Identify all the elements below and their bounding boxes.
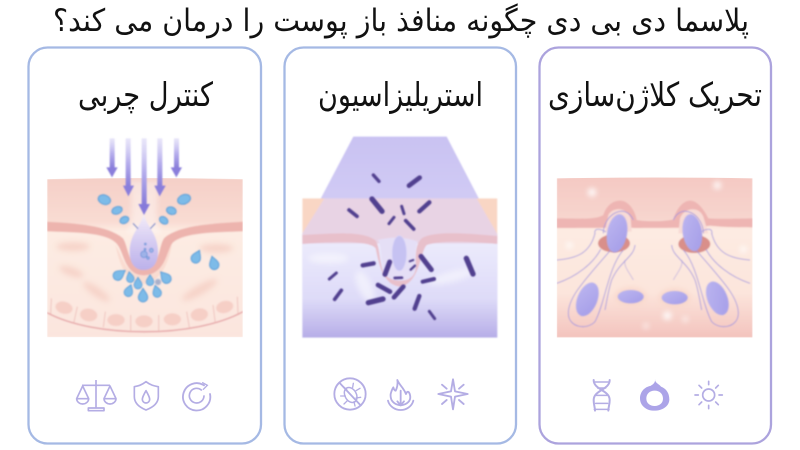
heading: oil control: کنترل چربی (78, 75, 213, 114)
main title: پلاسما دی بی دی چگونه منافذ باز پوست را درمان می کند؟ (53, 3, 749, 39)
plasma arrows (106, 138, 182, 215)
icon: sparkle (438, 379, 468, 409)
heading: sterilization: استریلیزاسیون (318, 75, 483, 114)
illustration: skin cross-section with oil droplets (47, 138, 243, 337)
icon: balance scale (77, 380, 116, 411)
icon: DNA helix (594, 380, 610, 411)
oil droplets (97, 193, 220, 302)
illustration: fibroblasts and collagen (557, 177, 753, 338)
icon: flame with arrow (388, 380, 413, 410)
icon: sun (695, 381, 722, 409)
icon: shield with drop (134, 382, 158, 410)
basal cells (54, 299, 235, 328)
illustration: plasma beam and bacteria (302, 137, 497, 338)
panel: collagen stimulation (540, 48, 771, 444)
icon: energy ring (640, 379, 669, 411)
icon: renewal circle (183, 383, 210, 411)
panel: sterilization (284, 48, 516, 444)
panel: oil control (28, 48, 261, 444)
collagen cells (571, 213, 733, 319)
bacteria (329, 175, 473, 319)
heading: collagen stimulation: تحریک کلاژن‌سازی (548, 75, 762, 114)
icon: no bacteria (334, 378, 366, 410)
